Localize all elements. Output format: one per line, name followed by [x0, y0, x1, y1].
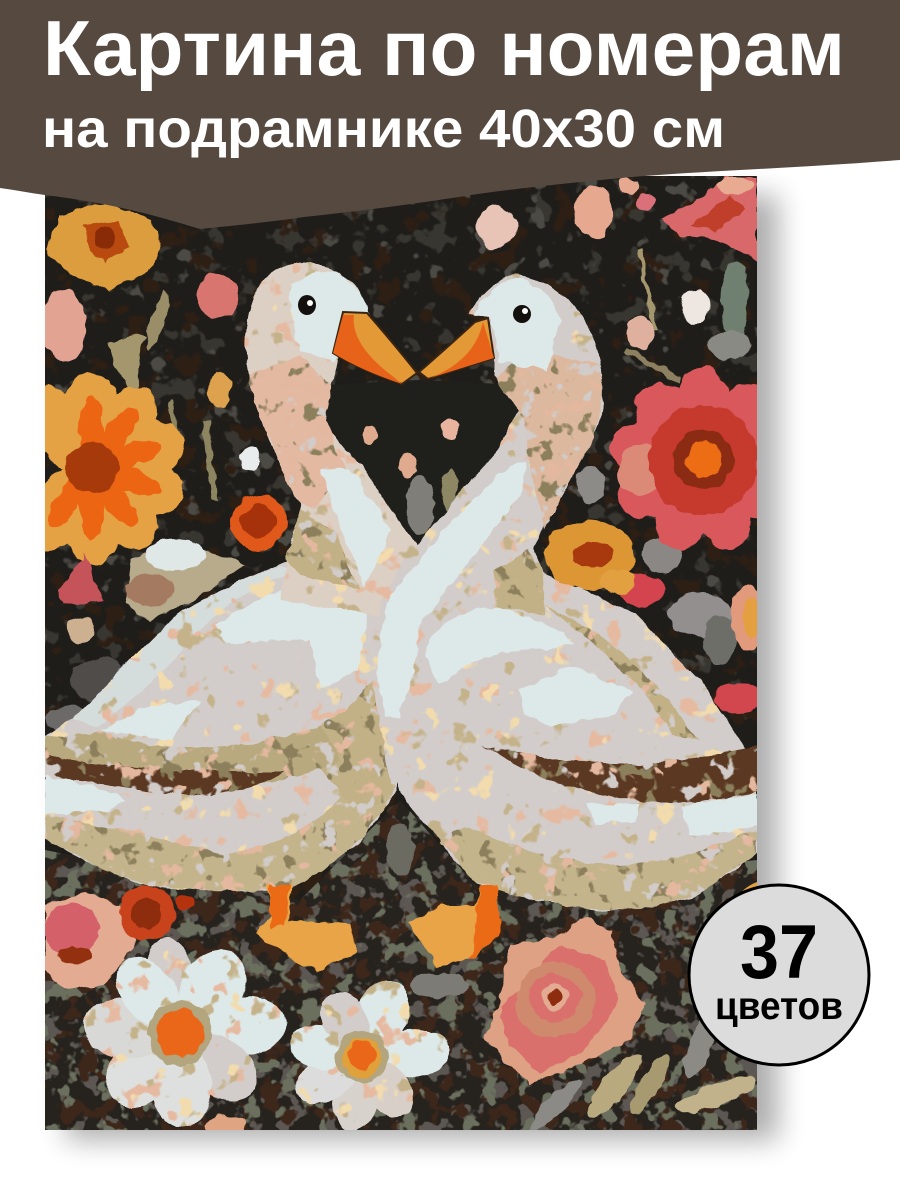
right edge flowers: [714, 584, 757, 714]
right goose: [373, 275, 757, 967]
left goose head highlight: [290, 271, 368, 362]
top right rose-red flower: [660, 176, 757, 260]
left goose neck highlight: [320, 468, 392, 588]
small red flower: [231, 494, 287, 550]
left pink flower and petal: [42, 273, 239, 361]
left goose wing lower highlight: [100, 700, 200, 740]
large orange flower: [45, 372, 185, 566]
right goose wing center highlight: [520, 665, 630, 725]
left goose wing: [102, 726, 318, 748]
left goose upper feather: [73, 565, 300, 728]
left daisy centre: [148, 1001, 212, 1065]
painting: two geese among flowers: [45, 176, 757, 1130]
dark heart between necks: [326, 380, 518, 537]
background leaves: [46, 250, 758, 1135]
small pink flowers left: [58, 555, 103, 643]
right goose chest tan: [493, 550, 545, 615]
white daisy left: [81, 933, 290, 1129]
right goose eye: [513, 305, 531, 323]
canvas shadow: [66, 195, 778, 1140]
left goose wing band tan: [45, 725, 340, 786]
header banner: [0, 0, 900, 229]
left goose body: [45, 562, 398, 892]
pink rose: [485, 918, 645, 1085]
left bottom rose and red ball flower: [44, 885, 193, 990]
right daisy centre: [336, 1031, 388, 1083]
title: Картина по номерам: [43, 4, 845, 92]
right goose wing upper highlight: [425, 608, 575, 685]
lower foliage background: [45, 800, 757, 1130]
large red flower: [608, 365, 757, 551]
left goose neck pink-tan shading: [250, 355, 345, 510]
painting background: [45, 176, 757, 900]
left goose: [45, 263, 420, 972]
left goose flank tan: [320, 681, 392, 796]
right goose neck highlight: [378, 463, 527, 720]
left goose wing highlight: [213, 585, 368, 690]
right goose tail: [587, 795, 757, 836]
small top flowers: [477, 178, 710, 350]
right goose brown feathers: [480, 745, 757, 803]
left goose beak: [333, 312, 417, 384]
orange flower behind badge: [720, 882, 757, 925]
left goose tail: [45, 775, 125, 815]
top-left orange flower: [46, 203, 162, 290]
badge label: цветов: [715, 985, 843, 1028]
right goose back tan stripe: [545, 605, 700, 740]
right goose head highlight: [473, 277, 560, 370]
left goose brown feathers: [45, 755, 285, 795]
white daisy right: [285, 973, 452, 1135]
left goose foot: [256, 885, 358, 972]
left goose neck and head: [246, 263, 417, 620]
right goose beak: [419, 318, 494, 379]
left goose eye: [298, 295, 316, 315]
right goose wing: [423, 608, 730, 760]
right goose body and neck: [373, 275, 757, 910]
badge number: 37: [740, 910, 818, 995]
right goose neck pink-tan shading: [495, 350, 601, 530]
ragged white flower: [125, 539, 245, 620]
right goose belly shade: [440, 825, 757, 910]
yellow-orange rose and small red flower: [545, 520, 664, 606]
left goose belly shade: [46, 784, 396, 892]
badge: 37 colours: [689, 885, 869, 1065]
right goose foot: [408, 885, 501, 967]
left goose neck tan base: [285, 510, 360, 590]
subtitle: на подрамнике 40х30 см: [42, 99, 725, 159]
